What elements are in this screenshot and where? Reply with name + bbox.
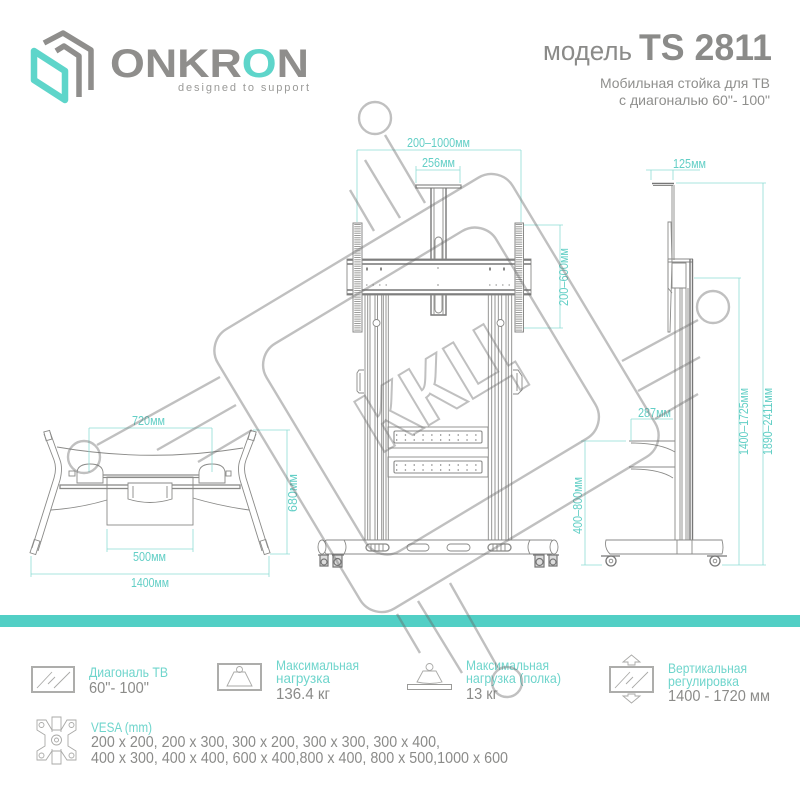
spec text: max load: 136.4 кг xyxy=(276,686,330,703)
icon: weight on shelf xyxy=(408,664,452,690)
dimension: 1400 xyxy=(31,556,269,590)
title: model xyxy=(543,27,772,68)
columns xyxy=(365,295,512,540)
teal divider bar xyxy=(0,615,800,627)
dimension: 500 xyxy=(107,529,193,564)
spec: max load xyxy=(218,657,359,703)
drawing: top view of base xyxy=(30,413,300,590)
spec: TV diagonal xyxy=(32,664,168,697)
dimension: 1890-2411: 1890–2411мм xyxy=(760,388,775,455)
icon: TV screen xyxy=(32,667,74,692)
icon: logo box teal xyxy=(34,51,65,100)
subtitle xyxy=(600,75,770,108)
spec text: diagonal: Диагональ ТВ xyxy=(89,664,168,680)
mount bar xyxy=(347,259,531,295)
spec text: VESA sizes: 200 x 200, 200 x 300, 300 x 200, 300 x 300, 300 x 400, xyxy=(91,734,440,751)
watermark inner rounded square xyxy=(254,218,608,564)
dimension: 1400-1725 xyxy=(694,278,751,565)
spec text: shelf load xyxy=(466,657,561,703)
dimension: 1400-1725: 1400–1725мм xyxy=(736,388,751,455)
spec text: vertical adjustment: регулировка xyxy=(668,673,739,689)
dimension: 720 xyxy=(89,413,212,472)
spec text: max load: Максимальная xyxy=(276,657,359,673)
shelves xyxy=(388,427,488,477)
spec: VESA xyxy=(37,717,508,767)
drawing: front view of stand xyxy=(318,135,571,567)
dimension: 200-600 xyxy=(524,225,571,328)
dimension: 256 xyxy=(416,155,460,183)
side view structure xyxy=(601,184,727,566)
spec text: VESA sizes: VESA (mm) xyxy=(91,719,152,735)
spec: TV diagonal: 60"- 100" xyxy=(89,680,149,697)
top view structure xyxy=(30,430,270,555)
spec text: vertical adjustment xyxy=(668,660,770,705)
icon: logo box gray xyxy=(44,33,91,97)
dimension: 500: 500мм xyxy=(133,549,166,564)
dimension: 1400: 1400мм xyxy=(131,575,169,590)
dimension: 125 xyxy=(646,156,706,180)
VESA arms xyxy=(353,223,524,332)
dimension: 680 xyxy=(253,430,300,554)
watermark pins bottom xyxy=(397,583,498,673)
watermark outer rounded square xyxy=(205,165,668,621)
spec: vertical adjustment xyxy=(610,655,770,705)
dimension: 680: 680мм xyxy=(285,474,300,512)
dimension: 287 xyxy=(631,405,673,441)
side handles xyxy=(357,370,522,394)
spec text: max load xyxy=(276,657,359,703)
dimension: 287: 287мм xyxy=(638,405,671,420)
subtitle: с диагональю 60"- 100" xyxy=(619,92,770,108)
spec text: shelf load: нагрузка (полка) xyxy=(466,670,561,686)
logo: ONKRON xyxy=(34,33,309,100)
drawing: side view of stand xyxy=(570,156,775,566)
spec text: max load: нагрузка xyxy=(276,670,330,686)
spec text: vertical adjustment: Вертикальная xyxy=(668,660,747,676)
dimension: 200-1000 xyxy=(357,135,521,222)
dimension: 720: 720мм xyxy=(132,413,165,428)
watermark: chip outline with letters xyxy=(68,102,729,697)
logo tagline: designed to support xyxy=(178,82,309,94)
model number: TS 2811 xyxy=(639,27,772,68)
base and casters xyxy=(318,540,559,567)
watermark pins left xyxy=(97,377,252,462)
center column and top plate xyxy=(416,185,461,315)
logo wordmark: ONKR ON xyxy=(110,42,309,86)
dimension: 200-600: 200–600мм xyxy=(556,248,571,306)
icon: weight in frame xyxy=(218,664,261,690)
dimension: 125: 125мм xyxy=(673,156,706,171)
model label: модель xyxy=(543,36,632,66)
watermark letters: ККЦ xyxy=(341,305,531,471)
spec text: shelf load: Максимальная xyxy=(466,657,549,673)
spec text: VESA sizes: 400 x 300, 400 x 400, 600 x 400,800 x 400, 800 x 500,1000 x 600 xyxy=(91,750,508,767)
dimension: 256: 256мм xyxy=(422,155,455,170)
dimension: 1890-2411 xyxy=(676,183,775,565)
icon: VESA plate xyxy=(37,717,76,764)
dimension: 400-800 xyxy=(570,441,626,565)
spec text: shelf load: 13 кг xyxy=(466,686,498,703)
spec: shelf load xyxy=(408,657,561,703)
subtitle: Мобильная стойка для ТВ xyxy=(600,75,770,91)
spec text: vertical adjustment: 1400 - 1720 мм xyxy=(668,688,770,705)
spec text: VESA sizes xyxy=(91,719,508,767)
dimension: 200-1000: 200–1000мм xyxy=(407,135,470,150)
watermark pins top xyxy=(350,135,425,231)
icon: TV with arrows xyxy=(610,655,653,703)
watermark pins right xyxy=(622,320,700,419)
dimension: 400-800: 400–800мм xyxy=(570,477,585,534)
